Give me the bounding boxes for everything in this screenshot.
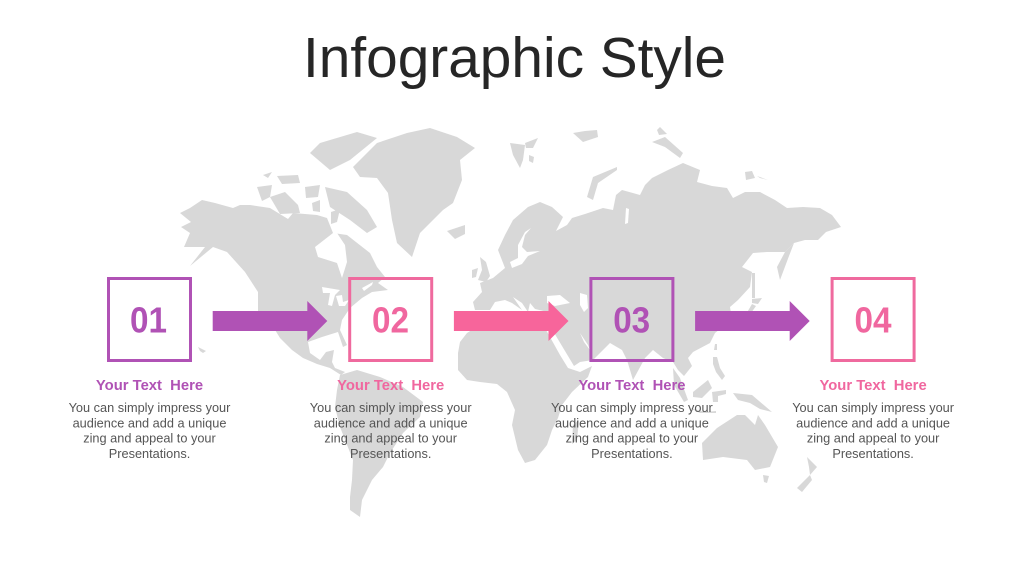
Madagascar (572, 420, 579, 444)
description 2: audience and add a unique (314, 415, 468, 430)
Arctic islands of Eurasia (510, 127, 768, 200)
description 3: audience and add a unique (555, 415, 709, 430)
description 2: Presentations. (350, 446, 431, 461)
description 1: You can simply impress your (69, 400, 231, 415)
heading 4: Your Text Here (820, 378, 927, 394)
Kamchatka (777, 243, 794, 280)
world map (180, 127, 841, 517)
Tasmania (763, 475, 769, 483)
South America (335, 370, 423, 517)
Southeast Asia islands (673, 344, 772, 413)
arrow 3 (695, 301, 810, 341)
number box 02 (350, 278, 432, 360)
heading 1: Your Text Here (96, 378, 203, 394)
description 4: zing and appeal to your (807, 431, 940, 446)
Arctic islands of Canada (257, 132, 377, 233)
heading 2: Your Text Here (337, 378, 444, 394)
step 2 (310, 278, 472, 461)
Africa (458, 318, 592, 463)
step 3 (551, 278, 714, 461)
title: Infographic Style (303, 27, 726, 90)
Eurasia (473, 163, 841, 380)
arrow 2 (454, 301, 568, 341)
description 2: zing and appeal to your (324, 431, 458, 446)
description 1: zing and appeal to your (83, 431, 217, 446)
description 3: Presentations. (591, 446, 673, 461)
Greenland (353, 128, 475, 257)
description 2: You can simply impress your (310, 400, 472, 415)
step 1 (69, 278, 231, 461)
Australia (702, 415, 778, 470)
Hawaii (198, 347, 206, 353)
number box 01 (108, 278, 190, 360)
number box 04 (832, 278, 914, 360)
number 03: 03 (613, 300, 650, 340)
New Zealand (797, 457, 817, 492)
Japan and Sakhalin (732, 273, 762, 330)
description 1: audience and add a unique (73, 415, 226, 430)
number box 03 (591, 278, 673, 360)
arrow 1 (213, 301, 327, 341)
description 3: zing and appeal to your (566, 431, 699, 446)
description 4: audience and add a unique (796, 415, 950, 430)
number 04: 04 (854, 300, 892, 340)
inland waters (315, 208, 629, 350)
description 4: You can simply impress your (792, 400, 955, 415)
heading 3: Your Text Here (578, 378, 685, 394)
description 1: Presentations. (109, 446, 190, 461)
number 01: 01 (130, 300, 167, 340)
UK and Ireland (472, 257, 490, 282)
step 4 (792, 278, 955, 461)
North America (180, 200, 388, 375)
number 02: 02 (372, 300, 409, 340)
Iceland (447, 225, 465, 239)
description 3: You can simply impress your (551, 400, 714, 415)
description 4: Presentations. (832, 446, 914, 461)
